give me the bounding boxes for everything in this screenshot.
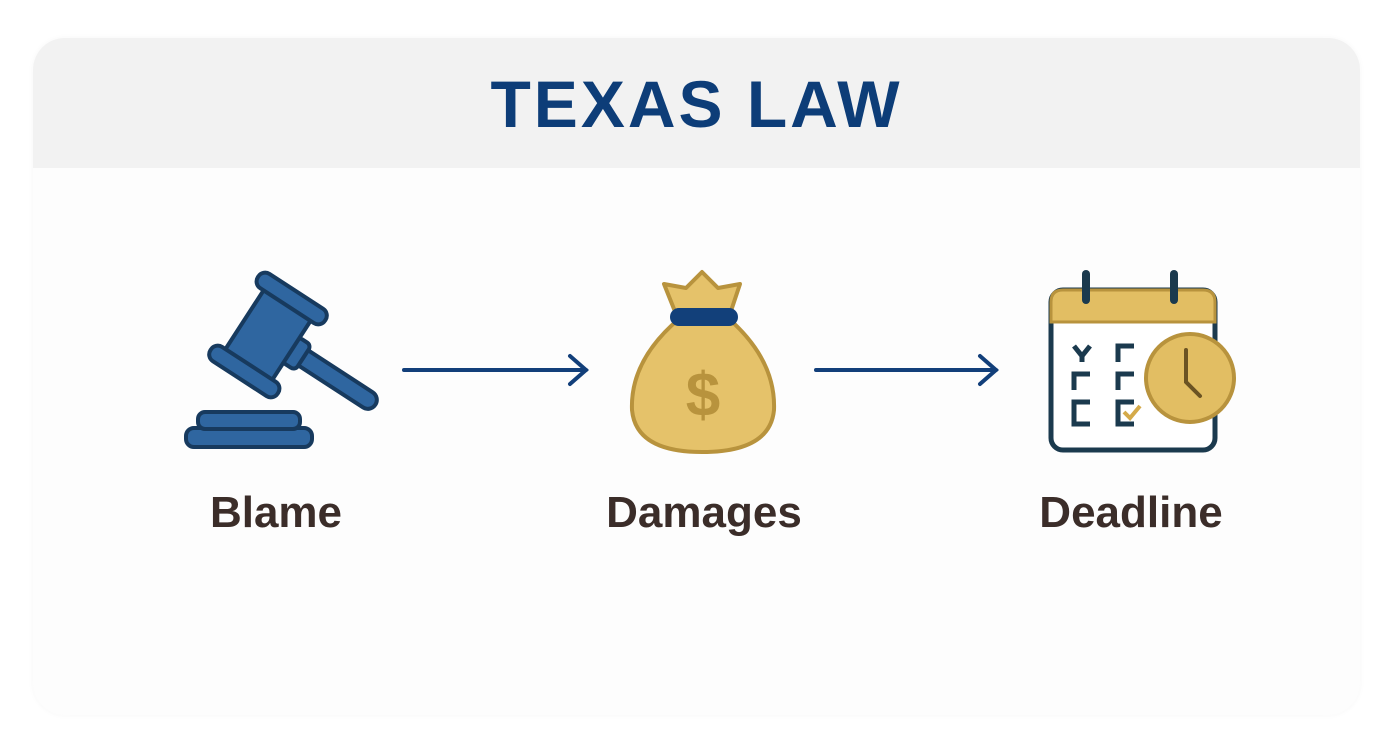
title: TEXAS LAW bbox=[490, 67, 902, 141]
label: Deadline: Deadline bbox=[1039, 488, 1223, 537]
arrow 1 bbox=[404, 356, 586, 384]
label: Blame: Blame bbox=[210, 488, 342, 537]
icon: gavel bbox=[186, 270, 404, 448]
icon: money bag bbox=[632, 272, 774, 452]
icon: money bag: $ bbox=[686, 361, 720, 430]
icon: calendar with clock bbox=[1051, 270, 1234, 450]
header band bbox=[33, 38, 1360, 168]
arrow 2 bbox=[816, 356, 996, 384]
label: Damages: Damages bbox=[606, 488, 802, 537]
